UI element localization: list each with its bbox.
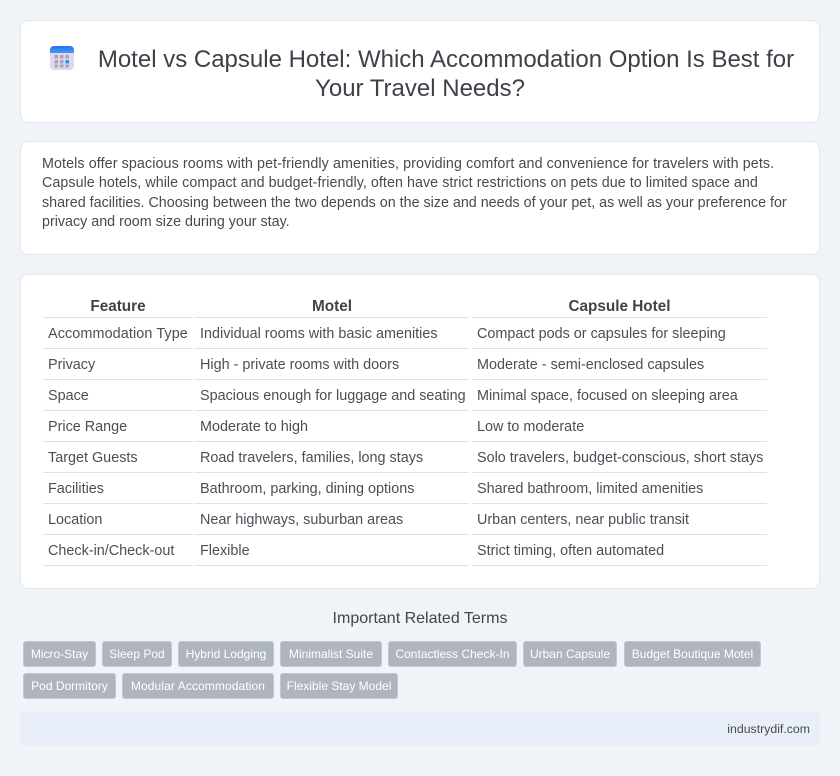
heading: related terms: Important Related Terms: [333, 610, 507, 627]
row: location: Urban centers, near public transit: [477, 512, 689, 528]
table header: Feature: [90, 298, 146, 315]
row: accommodation type: [43, 326, 767, 349]
related term tags: Pod Dormitory: [31, 679, 108, 693]
row: check-in/check-out: Check-in/Check-out: [48, 543, 174, 559]
row: privacy: Moderate - semi-enclosed capsules: [477, 357, 704, 373]
row: price range: Price Range: [48, 419, 127, 435]
row: price range: Low to moderate: [477, 419, 584, 435]
row: privacy: [43, 357, 767, 380]
table header: Capsule Hotel: [568, 298, 670, 315]
related term tags: Urban Capsule: [530, 647, 610, 661]
comparison table: [43, 298, 767, 566]
row: target guests: Solo travelers, budget-conscious, short stays: [477, 450, 763, 466]
title: Motel vs Capsule Hotel: Which Accommodation Option Is Best for: [98, 46, 794, 73]
footer bar: [20, 712, 820, 746]
related term tags: Modular Accommodation: [131, 679, 265, 693]
panel: intro: [20, 141, 820, 255]
intro text: privacy and room size during your stay.: [42, 214, 290, 230]
intro text: Motels offer spacious rooms with pet-friendly amenities, providing comfort and convenience for travelers with pets.: [42, 156, 774, 172]
row: facilities: Bathroom, parking, dining options: [200, 481, 414, 497]
row: accommodation type: Accommodation Type: [48, 326, 188, 342]
footer credit: industrydif.com: [727, 722, 810, 736]
row: location: Location: [48, 512, 102, 528]
related term tags: Contactless Check-In: [395, 647, 510, 661]
row: privacy: Privacy: [48, 357, 95, 373]
row: location: [43, 512, 767, 535]
panel: header: [20, 20, 820, 123]
row: space: Minimal space, focused on sleeping area: [477, 388, 738, 404]
row: target guests: Target Guests: [48, 450, 138, 466]
related term tags: Micro-Stay: [31, 647, 88, 661]
row: price range: Moderate to high: [200, 419, 308, 435]
title: Your Travel Needs?: [315, 75, 525, 102]
row: accommodation type: Individual rooms with basic amenities: [200, 326, 438, 342]
row: check-in/check-out: Strict timing, often automated: [477, 543, 664, 559]
row: facilities: Shared bathroom, limited amenities: [477, 481, 703, 497]
related term tags: [23, 641, 761, 699]
row: target guests: [43, 450, 767, 473]
icon: calendar: [50, 46, 74, 70]
row: location: Near highways, suburban areas: [200, 512, 403, 528]
row: space: Space: [48, 388, 89, 404]
intro text: Capsule hotels, while compact and budget-friendly, often have strict restrictions on pets due to limited space and: [42, 175, 758, 191]
row: facilities: [43, 481, 767, 504]
table header: Motel: [312, 298, 352, 315]
row: check-in/check-out: Flexible: [200, 543, 250, 559]
row: target guests: Road travelers, families, long stays: [200, 450, 423, 466]
panel: comparison table: [20, 274, 820, 589]
related term tags: Budget Boutique Motel: [632, 647, 753, 661]
row: privacy: High - private rooms with doors: [200, 357, 399, 373]
row: accommodation type: Compact pods or capsules for sleeping: [477, 326, 726, 342]
table header: [43, 298, 767, 318]
row: space: [43, 388, 767, 411]
row: space: Spacious enough for luggage and seating: [200, 388, 466, 404]
title: [98, 46, 794, 102]
row: facilities: Facilities: [48, 481, 104, 497]
row: price range: [43, 419, 767, 442]
related term tags: Minimalist Suite: [289, 647, 373, 661]
intro text: [42, 156, 787, 230]
related term tags: Hybrid Lodging: [186, 647, 266, 661]
related term tags: Flexible Stay Model: [287, 679, 391, 693]
related term tags: Sleep Pod: [109, 647, 165, 661]
intro text: shared facilities. Choosing between the two depends on the size and needs of your pet, as well as your preference for: [42, 194, 787, 210]
row: check-in/check-out: [43, 543, 767, 566]
